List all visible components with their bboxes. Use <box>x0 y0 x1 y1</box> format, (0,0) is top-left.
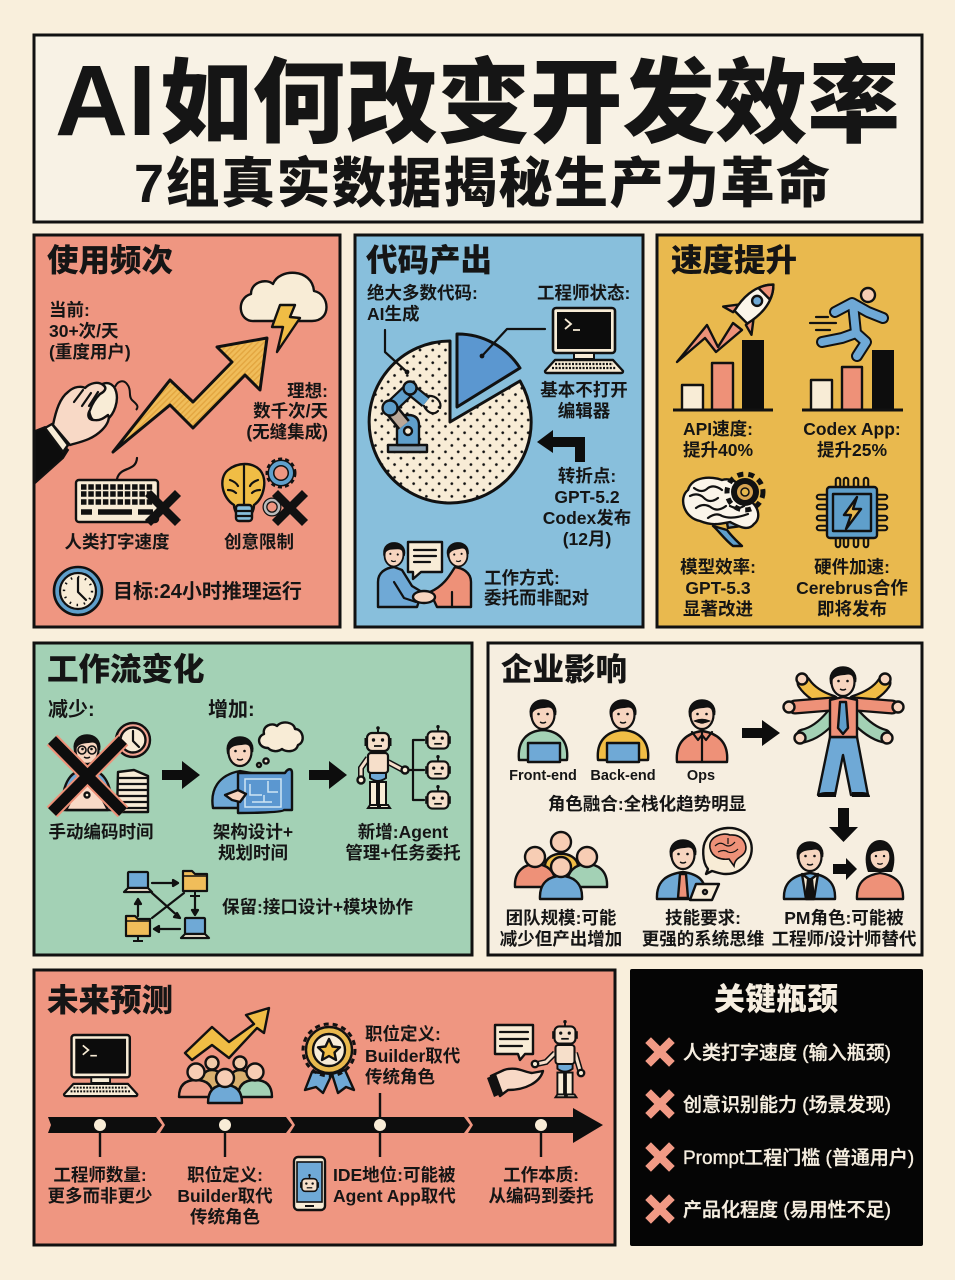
arrow: down to PM <box>829 808 858 842</box>
main title: 如何改变开发效率 <box>160 53 900 155</box>
heading: speed boost: 速度提升 <box>671 242 797 278</box>
label: model efficiency: 显著改进 <box>683 599 753 619</box>
goal text: 目标:24小时推理运行 <box>113 580 302 603</box>
label: Codex App: 提升25% <box>817 440 887 460</box>
label: job definition lower: 职位定义: <box>187 1165 263 1185</box>
icon: person with brain bubble <box>657 828 752 900</box>
arrow: to agent <box>309 761 347 789</box>
label: creativity limits: 创意限制 <box>224 532 294 552</box>
icon: chip with lightning <box>819 480 885 545</box>
label: hardware acceleration: 硬件加速: <box>814 557 890 577</box>
turning point text: (12月) <box>563 529 611 549</box>
label: API speed: API速度: <box>683 419 753 439</box>
title panel <box>34 35 922 222</box>
panel: key bottlenecks <box>630 969 923 1246</box>
arrow: to architecture <box>162 761 200 789</box>
label: human typing speed: 人类打字速度 <box>64 532 170 552</box>
icon: storm cloud <box>241 273 326 352</box>
label: Ops: Ops <box>687 768 715 784</box>
label: IDE status: Agent App取代 <box>333 1186 456 1206</box>
label: skill requirement: 更强的系统思维 <box>642 929 764 949</box>
arrow: to full stack person <box>742 720 780 746</box>
label: decrease: 减少: <box>48 698 95 721</box>
AI generated text: 绝大多数代码: <box>367 283 478 303</box>
job definition text upper: 职位定义: <box>365 1024 441 1044</box>
role merge text: 角色融合:全栈化趋势明显 <box>548 794 746 814</box>
heading: code output: 代码产出 <box>366 242 492 278</box>
icon: engineer terminal <box>64 1035 137 1096</box>
label: keep interface design: 保留:接口设计+模块协作 <box>222 897 413 917</box>
label: model efficiency: 模型效率: <box>680 557 756 577</box>
panel: enterprise impact <box>488 643 922 955</box>
icon: brain bulb with gears crossed out <box>222 459 305 523</box>
job definition text upper: Builder取代 <box>365 1046 461 1066</box>
ideal usage text: (无缝集成) <box>246 422 328 442</box>
icon: rocket and bar chart <box>673 270 788 410</box>
label: agent management: 新增:Agent <box>358 822 448 842</box>
label: Back-end: Back-end <box>590 768 656 784</box>
icon: team <box>515 832 607 899</box>
icon: hand on mouse <box>35 379 137 483</box>
label: job definition lower: 传统角色 <box>190 1207 260 1227</box>
icon: award badge <box>303 1024 355 1093</box>
label: nature of work: 从编码到委托 <box>488 1186 594 1206</box>
icon: front-end developer <box>519 700 567 762</box>
label: skill requirement: 技能要求: <box>665 908 741 928</box>
icon: monitor terminal <box>545 308 623 373</box>
icon: clock <box>54 567 102 615</box>
icon: robot and hand <box>487 1020 584 1097</box>
item: productization: 产品化程度 (易用性不足) <box>683 1199 891 1221</box>
heading: enterprise impact: 企业影响 <box>501 651 627 687</box>
icon: module network <box>124 871 209 941</box>
AI generated text: AI生成 <box>367 304 420 324</box>
icon: ops person <box>677 700 727 762</box>
panel: workflow change <box>34 643 472 955</box>
item: idea recognition: 创意识别能力 (场景发现) <box>683 1094 891 1116</box>
icon: handshake <box>378 542 471 607</box>
label: hardly opens editor: 编辑器 <box>558 401 611 421</box>
label: increase: 增加: <box>208 698 255 721</box>
engineer status text: 工程师状态: <box>537 283 630 303</box>
heading: future prediction: 未来预测 <box>47 982 173 1018</box>
label: engineer count: 更多而非更少 <box>48 1186 152 1206</box>
turning point text: GPT-5.2 <box>554 487 620 507</box>
label: agent management: 管理+任务委托 <box>345 843 461 863</box>
work mode text: 委托而非配对 <box>484 588 589 608</box>
label: hardware acceleration: 即将发布 <box>817 599 887 619</box>
icon: keyboard crossed out <box>76 458 178 523</box>
current usage text: (重度用户) <box>49 342 131 362</box>
current usage text: 30+次/天 <box>49 321 119 341</box>
label: hardware acceleration: Cerebrus合作 <box>796 578 908 598</box>
icon: PM to designer <box>784 840 903 899</box>
label: API speed: 提升40% <box>683 440 753 460</box>
heading: usage frequency: 使用频次 <box>47 242 174 278</box>
label: team size: 减少但产出增加 <box>500 929 622 949</box>
icon: robot arm <box>382 382 440 452</box>
icon: runner and bar chart <box>802 288 903 410</box>
label: Front-end: Front-end <box>509 768 577 784</box>
main title: AI <box>55 45 156 157</box>
label: PM role: 工程师/设计师替代 <box>772 929 917 949</box>
panel: code output <box>355 235 643 627</box>
icon: robot managing agents <box>358 725 451 809</box>
icon: manual coding crossed out <box>52 723 150 812</box>
subtitle: 7组真实数据揭秘生产力革命 <box>134 153 830 214</box>
icon: brain with gear <box>683 474 763 546</box>
label: engineer count: 工程师数量: <box>53 1165 147 1185</box>
ideal usage text: 理想: <box>287 381 328 401</box>
icon: back-end developer <box>598 700 648 762</box>
label: team size: 团队规模:可能 <box>506 908 617 928</box>
icon: growth team <box>179 1008 272 1103</box>
icon: rising zigzag arrow <box>113 338 267 452</box>
label: PM role: PM角色:可能被 <box>784 908 904 928</box>
heading: key bottlenecks: 关键瓶颈 <box>714 982 838 1017</box>
turning point text: 转折点: <box>558 466 616 486</box>
panel: usage frequency <box>34 235 340 627</box>
pie chart <box>369 329 545 503</box>
panel: speed boost <box>657 235 922 627</box>
current usage text: 当前: <box>49 300 90 320</box>
item: prompt threshold: Prompt工程门槛 (普通用户) <box>683 1147 914 1169</box>
label: nature of work: 工作本质: <box>503 1165 579 1185</box>
panel: future prediction <box>34 970 615 1245</box>
icon: person with blueprint <box>212 722 303 813</box>
label: IDE status: IDE地位:可能被 <box>333 1165 456 1185</box>
label: hardly opens editor: 基本不打开 <box>540 380 628 400</box>
icon: multi-armed full-stack person <box>784 667 904 797</box>
arrow: turning point <box>537 430 585 462</box>
icon: phone with robot <box>294 1157 325 1210</box>
label: manual coding time: 手动编码时间 <box>48 822 154 842</box>
label: architecture and planning time: 架构设计+ <box>213 822 293 842</box>
heading: workflow change: 工作流变化 <box>47 651 205 687</box>
timeline arrow <box>48 1093 603 1157</box>
label: Codex App: Codex App: <box>803 419 901 439</box>
work mode text: 工作方式: <box>484 568 560 588</box>
label: architecture and planning time: 规划时间 <box>218 843 288 863</box>
turning point text: Codex发布 <box>543 508 631 528</box>
label: model efficiency: GPT-5.3 <box>685 578 751 598</box>
job definition text upper: 传统角色 <box>365 1067 435 1087</box>
label: job definition lower: Builder取代 <box>177 1186 273 1206</box>
item: typing speed: 人类打字速度 (输入瓶颈) <box>683 1042 891 1064</box>
ideal usage text: 数千次/天 <box>253 401 328 421</box>
